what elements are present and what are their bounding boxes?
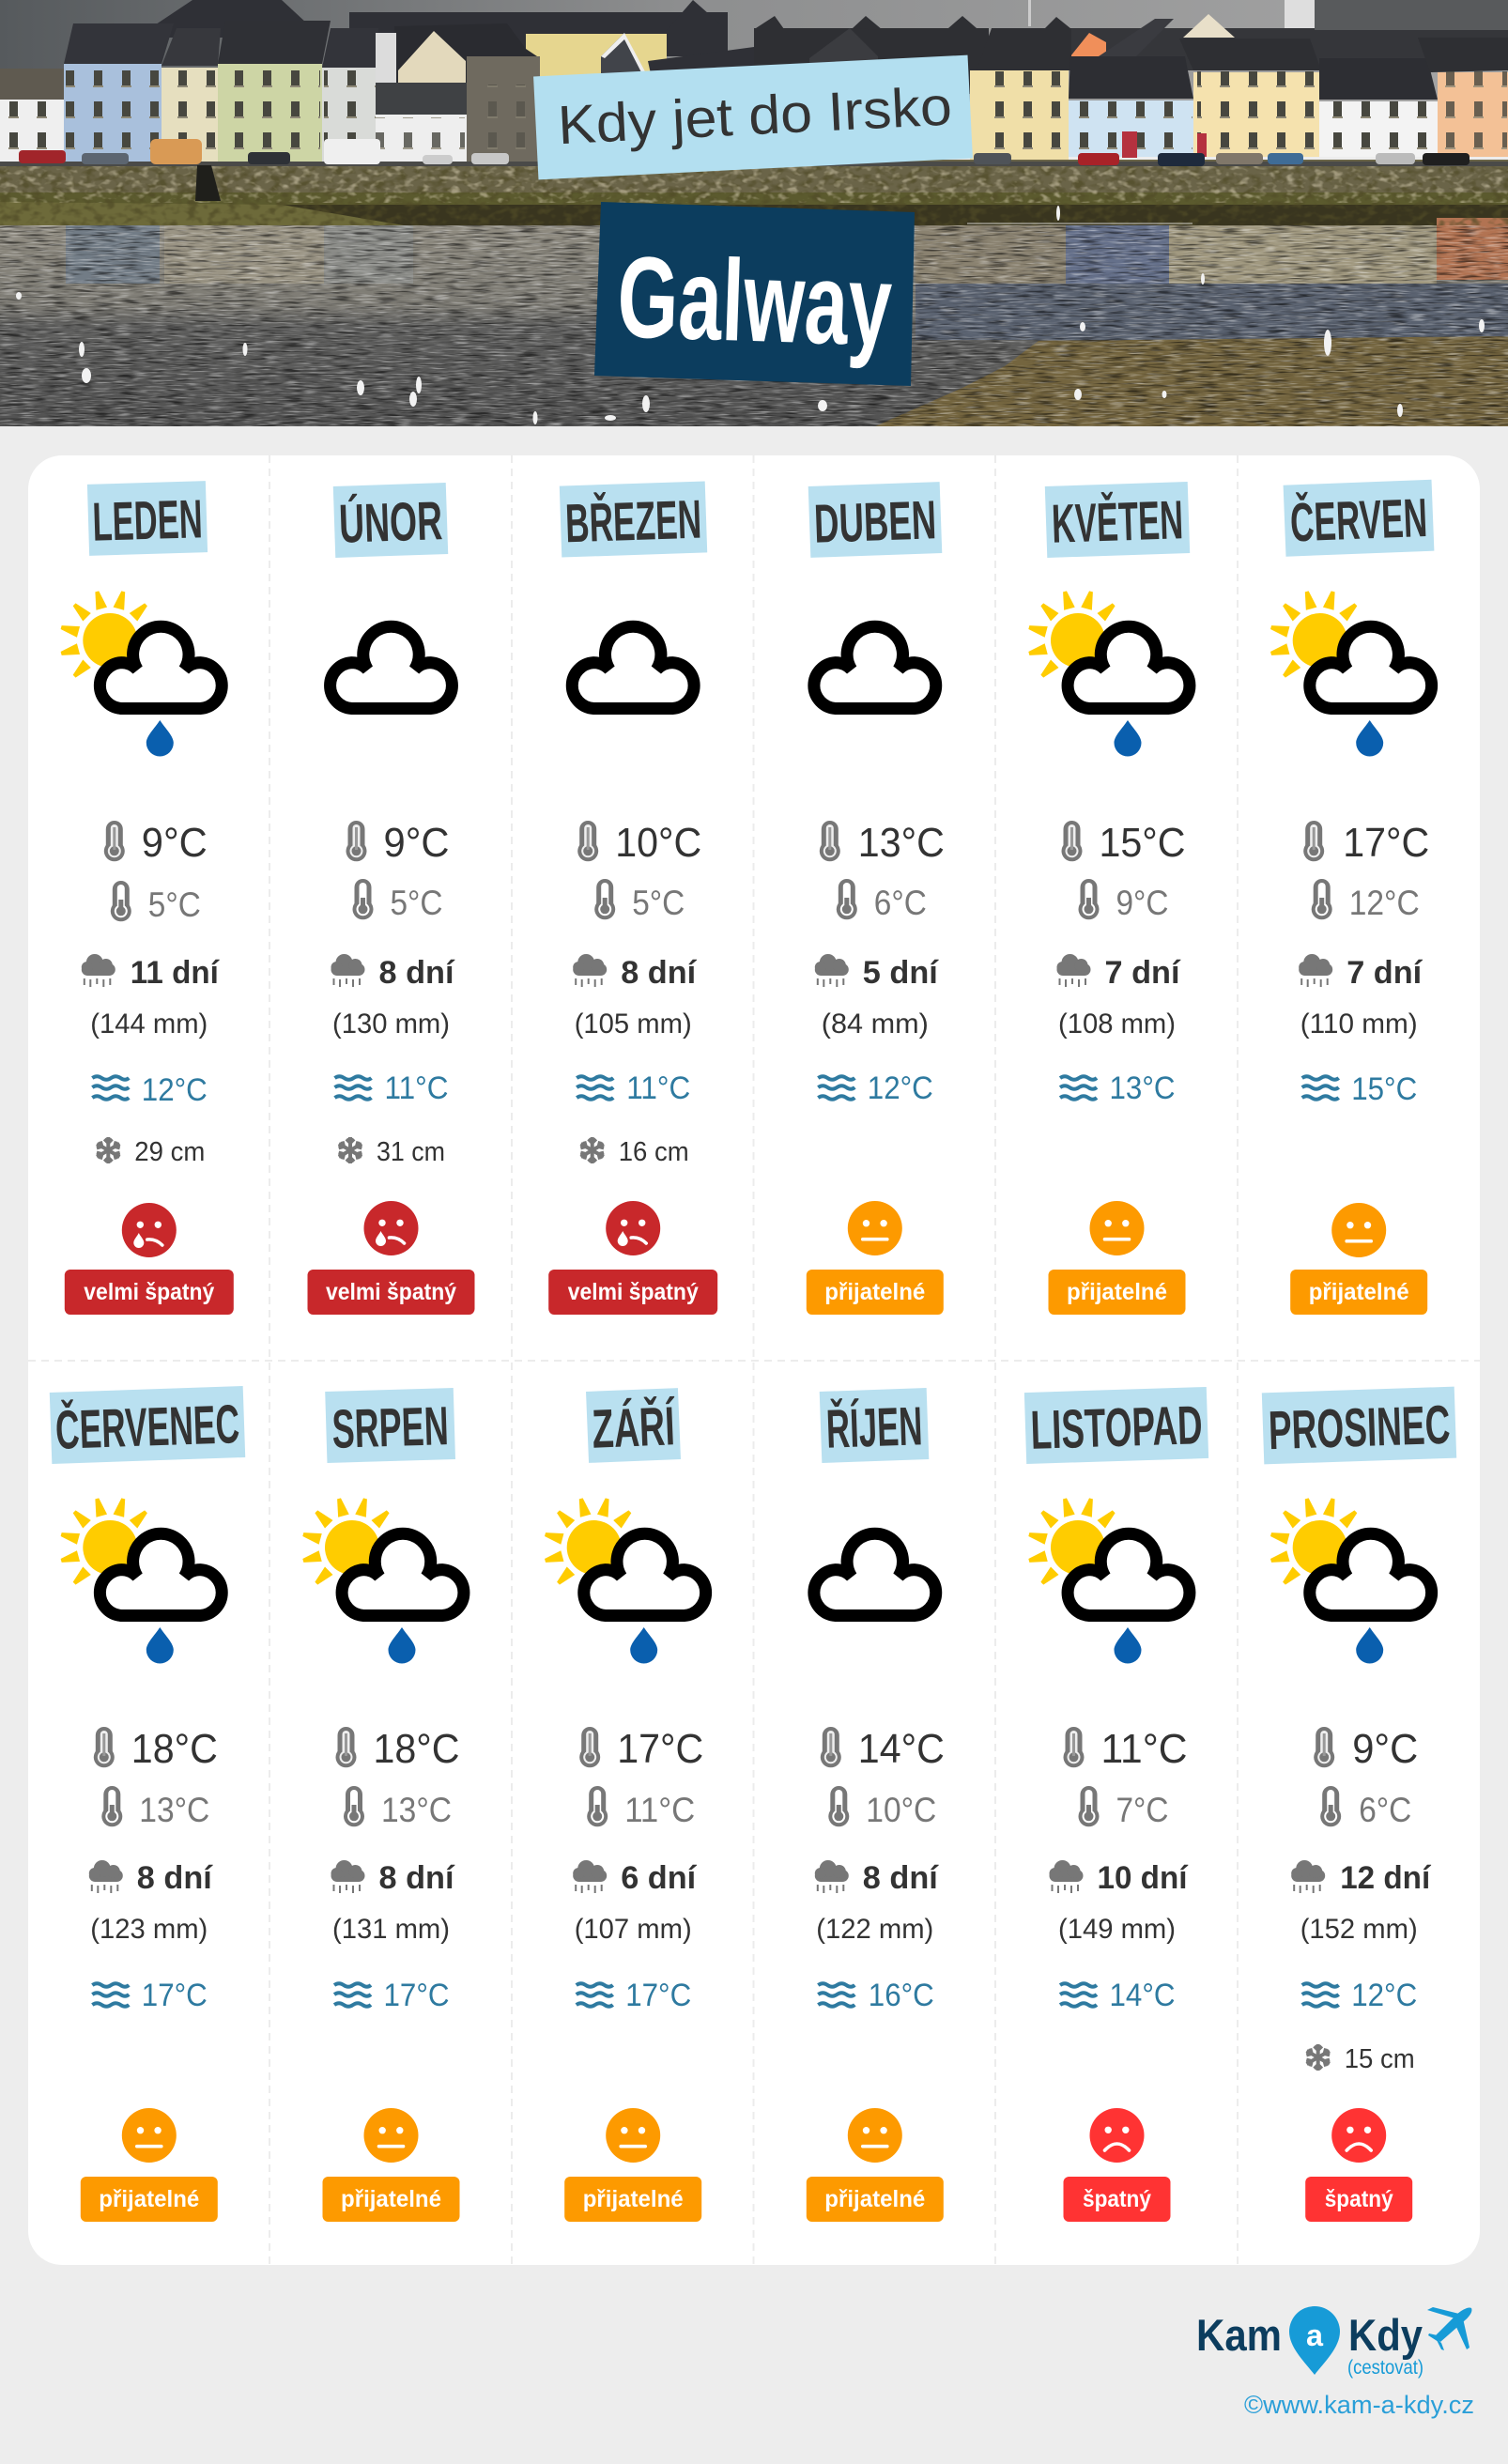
rating badge: přijatelné	[824, 1279, 925, 1305]
panel: únor	[308, 483, 475, 1315]
rating badge: přijatelné	[1067, 1279, 1167, 1305]
icon: sad face	[1331, 2108, 1386, 2163]
rating badge: špatný	[1325, 2186, 1393, 2212]
icon: cloud	[331, 626, 452, 708]
sea temperature: 14°C	[1110, 1978, 1176, 2013]
max temperature	[336, 1726, 460, 1772]
snow	[337, 1137, 445, 1167]
min temperature	[344, 1786, 452, 1829]
max temperature	[577, 820, 701, 866]
icon: neutral face	[1331, 1203, 1386, 1257]
month label	[50, 1386, 245, 1464]
rating badge	[564, 2177, 701, 2222]
min temperature	[1312, 879, 1420, 922]
min temperature: 11°C	[624, 1791, 695, 1829]
precipitation: (107 mm)	[575, 1914, 692, 1945]
logo: Kam a Kdy (cestovat): (cestovat)	[1347, 2357, 1423, 2379]
icon: crying face	[606, 1201, 660, 1255]
panel: monthly weather card	[28, 455, 1480, 2265]
banner: Galway: Galway	[616, 233, 894, 371]
month label: SRPEN	[331, 1395, 450, 1460]
precipitation: (84 mm)	[822, 1009, 929, 1040]
min temperature: 7°C	[1116, 1791, 1168, 1829]
month label	[87, 481, 208, 556]
max temperature	[820, 820, 945, 866]
min temperature	[1078, 1786, 1168, 1829]
rating badge: přijatelné	[824, 2186, 925, 2212]
rating badge: velmi špatný	[84, 1279, 214, 1305]
sea temperature: 13°C	[1110, 1070, 1176, 1106]
precipitation: (130 mm)	[332, 1009, 450, 1040]
max temperature	[1303, 820, 1429, 866]
panel: září	[544, 1388, 706, 2222]
rating badge	[1063, 2177, 1170, 2222]
icon: cloud	[814, 1533, 936, 1615]
min temperature: 10°C	[866, 1791, 936, 1829]
max temperature	[1063, 1726, 1187, 1772]
sea temperature: 12°C	[142, 1072, 208, 1108]
rating badge: velmi špatný	[568, 1279, 699, 1305]
rating badge: přijatelné	[1309, 1279, 1409, 1305]
month label	[325, 1388, 455, 1463]
panel: březen	[548, 481, 717, 1315]
rainy days	[573, 954, 698, 991]
min temperature	[1078, 879, 1168, 922]
sea temperature	[1060, 1978, 1176, 2013]
icon: cloud	[572, 626, 694, 708]
sea temperature: 16°C	[869, 1978, 934, 2013]
icon: sun, cloud, rain	[1027, 1497, 1190, 1663]
rainy days	[1057, 954, 1181, 991]
max temperature: 14°C	[858, 1726, 945, 1772]
precipitation: (108 mm)	[1058, 1009, 1176, 1040]
max temperature	[346, 820, 449, 866]
month label	[820, 1388, 929, 1463]
rating badge	[807, 2177, 944, 2222]
month label	[586, 1388, 681, 1463]
sea temperature	[577, 1978, 691, 2013]
rainy days: 11 dní	[131, 955, 220, 991]
rating badge	[65, 1270, 234, 1315]
rainy days	[331, 954, 455, 991]
month label	[808, 482, 942, 558]
rainy days: 7 dní	[1104, 955, 1181, 991]
rainy days	[815, 954, 939, 991]
panel: říjen	[807, 1388, 945, 2222]
rainy days: 12 dní	[1340, 1860, 1432, 1896]
max temperature: 18°C	[374, 1726, 460, 1772]
snow	[1305, 2044, 1415, 2074]
month label	[333, 483, 448, 558]
rainy days	[331, 1860, 455, 1896]
month label: DUBEN	[813, 489, 937, 555]
sea temperature: 12°C	[868, 1070, 933, 1106]
icon: neutral face	[606, 2108, 660, 2163]
icon: sun, cloud, rain	[301, 1497, 464, 1663]
panel: duben	[807, 482, 945, 1315]
rainy days	[1291, 1860, 1432, 1896]
sea temperature: 17°C	[625, 1978, 691, 2013]
sea temperature: 12°C	[1351, 1978, 1417, 2013]
precipitation: (144 mm)	[90, 1009, 208, 1040]
max temperature: 13°C	[858, 820, 945, 866]
max temperature	[94, 1726, 218, 1772]
precipitation: (131 mm)	[332, 1914, 450, 1945]
rainy days: 6 dní	[621, 1860, 698, 1896]
rainy days	[82, 954, 220, 991]
min temperature	[594, 879, 685, 922]
icon: sun, cloud, rain	[60, 590, 222, 756]
max temperature: 9°C	[383, 820, 449, 866]
sea temperature	[92, 1072, 208, 1108]
precipitation: (110 mm)	[1300, 1009, 1418, 1040]
rating badge	[1290, 1270, 1427, 1315]
rating badge: přijatelné	[99, 2186, 199, 2212]
max temperature	[579, 1726, 703, 1772]
precipitation: (105 mm)	[575, 1009, 692, 1040]
rating badge	[308, 1270, 475, 1315]
month label: ÚNOR	[338, 490, 443, 555]
rainy days: 10 dní	[1097, 1860, 1189, 1896]
min temperature: 5°C	[391, 884, 443, 922]
month label	[1045, 482, 1190, 558]
rainy days: 8 dní	[379, 1860, 455, 1896]
sea temperature	[334, 1978, 449, 2013]
rainy days	[573, 1860, 698, 1896]
month label: LISTOPAD	[1030, 1394, 1204, 1461]
rainy days: 8 dní	[621, 955, 698, 991]
max temperature	[821, 1726, 945, 1772]
rainy days: 8 dní	[379, 955, 455, 991]
max temperature: 9°C	[1352, 1726, 1418, 1772]
rating badge: přijatelné	[341, 2186, 441, 2212]
min temperature: 9°C	[1116, 884, 1168, 922]
source url: ©www.kam-a-kdy.cz	[1244, 2391, 1474, 2419]
icon: neutral face	[122, 2108, 177, 2163]
min temperature	[837, 879, 927, 922]
month label	[1284, 480, 1434, 557]
max temperature: 17°C	[617, 1726, 703, 1772]
month label: LEDEN	[92, 488, 204, 553]
icon: cloud	[814, 626, 936, 708]
icon: crying face	[122, 1203, 177, 1257]
logo: Kam a Kdy (cestovat): a	[1306, 2318, 1323, 2352]
sea temperature: 11°C	[626, 1070, 690, 1106]
banner: Galway	[594, 202, 915, 386]
logo: Kam a Kdy (cestovat): Kdy	[1348, 2310, 1423, 2360]
max temperature	[1314, 1726, 1418, 1772]
sea temperature	[818, 1070, 933, 1106]
max temperature: 15°C	[1099, 820, 1185, 866]
rating badge	[548, 1270, 717, 1315]
icon: neutral face	[1089, 1201, 1144, 1255]
min temperature	[353, 879, 443, 922]
panel: srpen	[301, 1388, 464, 2222]
min temperature: 13°C	[139, 1791, 209, 1829]
icon: sun, cloud, rain	[60, 1497, 222, 1663]
rainy days: 7 dní	[1346, 955, 1423, 991]
panel: červen	[1269, 480, 1434, 1315]
max temperature: 9°C	[142, 820, 208, 866]
rating badge	[807, 1270, 944, 1315]
rainy days	[1050, 1860, 1189, 1896]
min temperature	[587, 1786, 695, 1829]
icon: neutral face	[364, 2108, 419, 2163]
max temperature: 11°C	[1100, 1726, 1187, 1772]
snow	[579, 1137, 689, 1167]
sea temperature	[1302, 1071, 1417, 1107]
snow: 15 cm	[1345, 2044, 1415, 2074]
sea temperature	[92, 1978, 208, 2013]
icon: sad face	[1089, 2108, 1144, 2163]
min temperature: 13°C	[381, 1791, 452, 1829]
panel: květen	[1027, 482, 1190, 1315]
logo: Kam a Kdy (cestovat)	[1196, 2306, 1471, 2379]
sea temperature	[334, 1070, 449, 1106]
banner: Kdy jet do Irsko	[533, 55, 973, 179]
sea temperature: 15°C	[1351, 1071, 1417, 1107]
month label	[1024, 1387, 1208, 1464]
precipitation: (123 mm)	[90, 1914, 208, 1945]
max temperature	[104, 820, 208, 866]
sea temperature: 17°C	[383, 1978, 449, 2013]
rainy days	[815, 1860, 939, 1896]
rainy days	[1299, 954, 1423, 991]
sea temperature: 11°C	[385, 1070, 449, 1106]
rainy days: 8 dní	[863, 1860, 939, 1896]
rating badge	[1048, 1270, 1185, 1315]
min temperature	[828, 1786, 936, 1829]
rainy days: 5 dní	[863, 955, 939, 991]
min temperature: 12°C	[1349, 884, 1420, 922]
max temperature	[1061, 820, 1185, 866]
month label: BŘEZEN	[564, 489, 702, 554]
min temperature	[1320, 1786, 1411, 1829]
precipitation: (122 mm)	[816, 1914, 933, 1945]
icon: neutral face	[848, 2108, 902, 2163]
rating badge	[323, 2177, 460, 2222]
max temperature: 10°C	[615, 820, 701, 866]
max temperature: 18°C	[131, 1726, 218, 1772]
icon: sun, cloud, rain	[1269, 1497, 1432, 1663]
logo: Kam a Kdy (cestovat): Kam	[1196, 2310, 1282, 2360]
month label: ČERVENEC	[54, 1394, 240, 1461]
icon: sun, cloud, rain	[1027, 590, 1190, 756]
banner: Kdy jet do Irsko: Kdy jet do Irsko	[557, 76, 953, 156]
sea temperature	[1302, 1978, 1417, 2013]
rating badge	[81, 2177, 218, 2222]
min temperature	[101, 1786, 209, 1829]
panel: červenec	[50, 1386, 245, 2222]
min temperature: 6°C	[874, 884, 927, 922]
rainy days	[89, 1860, 213, 1896]
rating badge	[1305, 2177, 1412, 2222]
min temperature	[111, 881, 201, 924]
min temperature: 6°C	[1359, 1791, 1411, 1829]
panel: listopad	[1024, 1387, 1208, 2222]
sea temperature	[577, 1070, 690, 1106]
rainy days: 8 dní	[137, 1860, 213, 1896]
snow: 31 cm	[377, 1137, 445, 1167]
month label: ŘÍJEN	[825, 1395, 923, 1460]
rating badge: špatný	[1083, 2186, 1151, 2212]
precipitation: (152 mm)	[1300, 1914, 1418, 1945]
precipitation: (149 mm)	[1058, 1914, 1176, 1945]
panel: prosinec	[1262, 1387, 1456, 2222]
min temperature: 5°C	[148, 886, 201, 924]
min temperature: 5°C	[632, 884, 685, 922]
month label	[560, 481, 707, 558]
icon: neutral face	[848, 1201, 902, 1255]
snow	[95, 1137, 205, 1167]
month label: KVĚTEN	[1051, 489, 1184, 555]
rating badge: přijatelné	[583, 2186, 684, 2212]
sea temperature: 17°C	[142, 1978, 208, 2013]
snow: 16 cm	[619, 1137, 689, 1167]
snow: 29 cm	[134, 1137, 205, 1167]
icon: crying face	[364, 1201, 419, 1255]
rating badge: velmi špatný	[326, 1279, 456, 1305]
header photo: Galway waterfront	[0, 0, 1508, 426]
icon: sun, cloud, rain	[1269, 590, 1432, 756]
icon: sun, cloud, rain	[544, 1497, 706, 1663]
sea temperature	[818, 1978, 934, 2013]
sea temperature	[1060, 1070, 1176, 1106]
max temperature: 17°C	[1343, 820, 1429, 866]
month label: ZÁŘÍ	[591, 1395, 677, 1460]
panel: leden	[60, 481, 234, 1315]
